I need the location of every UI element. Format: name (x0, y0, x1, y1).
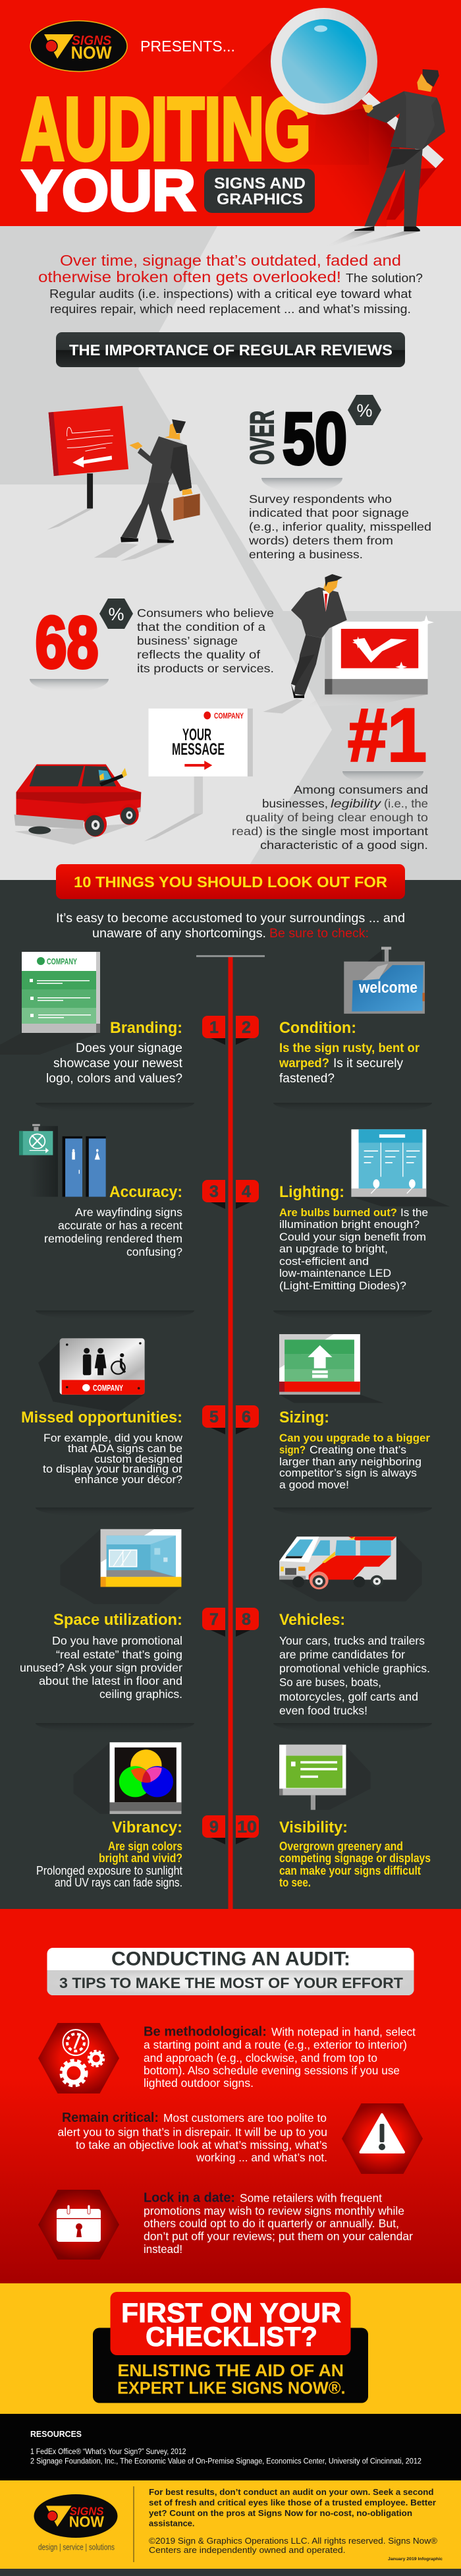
item 4: lighting: Is the (400, 1206, 428, 1219)
item 2: condition: Condition: (279, 1019, 356, 1037)
stat: 68 percent: 68 (36, 602, 99, 683)
item 9: vibrancy (36, 1819, 182, 1889)
item 4: lighting: Are bulbs burned out? (279, 1206, 397, 1219)
logo: Signs Now (30, 21, 127, 71)
text block: resources: RESOURCES (30, 2429, 82, 2439)
text: presents: PRESENTS... (140, 38, 235, 55)
item 6: sizing: a good move! (279, 1478, 349, 1491)
text block: footer note: set of fresh and critical eyes like those of a trusted employee. Better (149, 2498, 436, 2507)
item 1: branding: logo, colors and values? (46, 1072, 182, 1086)
text block: legibility (232, 783, 428, 852)
icon: bigger sign with arrow (279, 1334, 384, 1403)
text block: checklist intro: Be sure to check: (269, 927, 369, 941)
tip 1: be methodological: bottom). Also schedule evening sessions if you use (144, 2064, 400, 2077)
item 1: branding: showcase your newest (53, 1057, 183, 1070)
item 10: visibility: can make your signs difficult (279, 1864, 421, 1877)
text block: survey respondents: indicated that poor signage (249, 506, 409, 519)
item 10: visibility: Overgrown greenery and (279, 1840, 403, 1853)
heading banner: importance of regular reviews: THE IMPORTANCE OF REGULAR REVIEWS (69, 341, 393, 359)
item 1: branding: Branding: (110, 1019, 182, 1037)
text block: survey respondents: words) deters them from (248, 534, 393, 547)
logo: footer Signs Now: NOW (69, 2513, 104, 2530)
number tabs 5 and 6: 6 (242, 1408, 251, 1426)
heading banner: importance of regular reviews (56, 332, 405, 367)
item 5: missed opportunities: For example, did you know (43, 1432, 182, 1444)
text block: intro: requires repair, which need replacement ... and what’s missing. (50, 302, 411, 316)
item 5: missed opportunities: custom designed (94, 1453, 182, 1465)
text block: legibility: legibility (331, 797, 382, 810)
stat: over 50 percent (244, 395, 381, 492)
item 8: vehicles (279, 1611, 430, 1717)
number tabs 1 and 2: 2 (242, 1018, 251, 1037)
item 8: vehicles: Your cars, trucks and trailers (279, 1634, 425, 1647)
text block: intro: otherwise broken often gets overlooked! (38, 268, 341, 285)
item 3: accuracy: Are wayfinding signs (75, 1206, 182, 1219)
text block: consumers who believe (137, 606, 274, 675)
item 4: lighting: (Light-Emitting Diodes)? (279, 1279, 406, 1292)
item 2: condition: Is the sign rusty, bent or (279, 1041, 420, 1055)
heading banner: 10 things (56, 864, 405, 899)
item 5: missed opportunities: that ADA signs can be (68, 1443, 182, 1455)
item 7: space utilization (20, 1611, 182, 1701)
item 7: space utilization: “real estate” that’s going (56, 1648, 182, 1661)
item 10: visibility: competing signage or displays (279, 1852, 431, 1865)
text block: legibility: (i.e., the (384, 797, 428, 810)
item 5: missed opportunities: enhance your décor? (74, 1474, 182, 1486)
item 8: vehicles: motorcycles, golf carts and (279, 1690, 418, 1703)
tip 2: remain critical: alert you to sign that’s in disrepair. It will be up to you (58, 2125, 327, 2138)
logo: Signs Now: SIGNS (72, 34, 112, 48)
callout: first on your checklist: CHECKLIST? (146, 2321, 317, 2352)
item 2: condition: warped? (279, 1057, 329, 1070)
icon: branding sign (0, 952, 100, 1055)
item 6: sizing: larger than any neighboring (279, 1455, 421, 1468)
number tabs 1 and 2 (202, 1016, 259, 1045)
text block: resources (30, 2429, 421, 2465)
tip 3: lock in a date: don’t put off your reviews; put them on your calendar (144, 2229, 413, 2242)
item 3: accuracy (44, 1183, 182, 1258)
tip 2: remain critical: Remain critical: (62, 2111, 159, 2125)
item 4: lighting: Lighting: (279, 1183, 344, 1201)
item 7: space utilization: Do you have promotional (52, 1634, 182, 1647)
tip 2: remain critical (58, 2111, 327, 2164)
item 9: vibrancy: bright and vivid? (99, 1852, 182, 1865)
callout: first on your checklist (93, 2292, 368, 2403)
item 3: accuracy: confusing? (126, 1245, 182, 1258)
text block: intro (38, 252, 423, 316)
stat: over 50 percent: % (356, 401, 373, 421)
heading: signs and graphics pill (204, 169, 315, 213)
text block: survey respondents: Survey respondents who (249, 492, 392, 506)
number tabs 3 and 4: 4 (242, 1183, 251, 1201)
item 2: condition: welcome (358, 979, 418, 997)
icon: man with magnifier (326, 69, 445, 249)
item 4: lighting: cost-efficient and (279, 1255, 369, 1268)
item 8: vehicles: Vehicles: (279, 1611, 345, 1629)
heading: signs and graphics pill: SIGNS AND (214, 175, 306, 192)
logo: footer Signs Now (34, 2494, 117, 2538)
text block: checklist intro: unaware of any shortcomings. (92, 927, 266, 941)
item 2: condition: fastened? (279, 1072, 335, 1086)
text block: consumers who believe: that the condition of a (137, 620, 265, 633)
icon: calendar hexagon (38, 2190, 119, 2260)
text block: legibility: is the single most important (266, 825, 428, 838)
icon: rusty welcome sign (344, 947, 425, 1014)
item shadows (36, 1103, 432, 1734)
heading card: conducting an audit: 3 TIPS TO MAKE THE MOST OF YOUR EFFORT (59, 1975, 404, 1991)
tip 3: lock in a date: instead! (144, 2242, 182, 2256)
callout: first on your checklist: EXPERT LIKE SIGNS NOW®. (117, 2380, 345, 2398)
callout: first on your checklist: FIRST ON YOUR (121, 2297, 341, 2328)
number tabs 9 and 10: 9 (209, 1818, 219, 1836)
tip 1: be methodological: Be methodological: (144, 2025, 267, 2039)
text block: footer note: ©2019 Sign & Graphics Operations LLC. All rights reserved. Signs Now® (149, 2536, 437, 2546)
text block: resources: 2 Signage Foundation, Inc., The Economic Value of On-Premise Signage, Economics Center, University of Cincinnati, 2012 (30, 2457, 421, 2465)
icon: visibility sign (279, 1745, 370, 1810)
logo: Signs Now: NOW (71, 43, 112, 63)
stat: over 50 percent: 50 (283, 398, 347, 480)
item 10: visibility (279, 1819, 431, 1889)
item 8: vehicles: promotional vehicle graphics. (279, 1662, 430, 1675)
text block: checklist intro: It’s easy to become accustomed to your surroundings ... and (56, 912, 405, 925)
item 4: lighting: Could your sign benefit from (279, 1231, 426, 1243)
item 1: branding (46, 1019, 183, 1086)
number tabs 7 and 8: 7 (209, 1610, 219, 1629)
heading card: conducting an audit: CONDUCTING AN AUDIT: (111, 1948, 350, 1970)
text block: checklist intro (56, 912, 405, 941)
number tabs 1 and 2: 1 (209, 1018, 219, 1037)
text block: legibility: businesses, (262, 797, 328, 810)
item 7: space utilization: Space utilization: (53, 1611, 182, 1629)
number tabs 7 and 8: 8 (242, 1610, 251, 1629)
number tabs 3 and 4 (202, 1180, 259, 1209)
item 4: lighting: an upgrade to bright, (279, 1243, 388, 1255)
callout: first on your checklist: ENLISTING THE AID OF AN (117, 2362, 344, 2380)
icon: your message sign with car (14, 709, 253, 844)
icon: red misspelled sign with walking man (47, 406, 200, 561)
icon: gauge and gears hexagon (38, 2023, 119, 2093)
text block: survey respondents: (e.g., inferior quality, misspelled (249, 520, 431, 533)
item 4: lighting: illumination bright enough? (279, 1218, 420, 1231)
item 5: missed opportunities (21, 1383, 183, 1486)
item 3: accuracy: accurate or has a recent (58, 1219, 182, 1232)
heading: auditing: AUDITING (21, 79, 311, 179)
text block: footer note: January 2019 Infographic (388, 2558, 443, 2561)
text block: footer note: assistance. (149, 2518, 195, 2529)
item 4: lighting (279, 1183, 428, 1292)
text block: your message sign copy: COMPANY (214, 711, 244, 720)
text block: intro: Regular audits (i.e. inspections) with a critical eye toward what (49, 287, 412, 301)
number tabs 3 and 4: 3 (209, 1183, 219, 1201)
tip 1: be methodological: a starting point and a route (e.g., exterior to interior) (144, 2038, 407, 2051)
tip 3: lock in a date (144, 2191, 413, 2256)
item 9: vibrancy: and UV rays can fade signs. (55, 1876, 182, 1889)
icon: magnifying glass (271, 8, 444, 168)
logo: footer Signs Now: SIGNS (70, 2504, 104, 2517)
text block: your message sign copy: YOUR (182, 726, 211, 744)
text block: consumers who believe: reflects the quality of (137, 648, 260, 661)
icon: wrapped van (279, 1537, 422, 1601)
item 1: branding: Does your signage (76, 1041, 182, 1055)
text block: your message sign copy (172, 711, 244, 759)
number tabs 5 and 6: 5 (209, 1408, 219, 1426)
item 2: condition: Is it securely (333, 1057, 403, 1070)
heading card: conducting an audit (47, 1948, 414, 1995)
item 2: condition (279, 979, 420, 1086)
text block: your message sign copy: MESSAGE (172, 740, 225, 759)
icon: interior space sign (61, 1529, 181, 1604)
tip 3: lock in a date: promotions may wish to review signs monthly while (144, 2204, 404, 2217)
item 3: accuracy: remodeling rendered them (44, 1232, 182, 1245)
stat: over 50 percent: OVER (244, 411, 281, 465)
tip 2: remain critical: to take an objective look at what’s missing, what’s (76, 2138, 327, 2152)
text block: consumers who believe: business’ signage (137, 634, 238, 647)
text block: legibility: characteristic of a good sign. (260, 838, 428, 852)
text block: intro: Over time, signage that’s outdated, faded and (60, 252, 401, 269)
tip 3: lock in a date: Some retailers with frequent (240, 2191, 382, 2204)
item 9: vibrancy: Are sign colors (108, 1840, 182, 1853)
text block: survey respondents (248, 492, 431, 561)
stat: number one: #1 (348, 693, 427, 778)
number tabs 9 and 10: 10 (237, 1818, 257, 1836)
item 10: visibility: to see. (279, 1876, 311, 1889)
stat: 68 percent: % (108, 604, 124, 624)
text block: resources: 1 FedEx Office® “What’s Your Sign?” Survey, 2012 (30, 2448, 186, 2456)
item 10: visibility: Visibility: (279, 1819, 348, 1836)
item 6: sizing: sign? (279, 1444, 306, 1456)
item 5: missed opportunities: to display your branding or (43, 1463, 183, 1475)
item 9: vibrancy: Prolonged exposure to sunlight (36, 1864, 182, 1877)
icon: lighted sign (351, 1129, 450, 1206)
heading banner: 10 things: 10 THINGS YOU SHOULD LOOK OUT FOR (74, 873, 387, 891)
item 5: missed opportunities: Missed opportunities: (21, 1409, 182, 1426)
item 6: sizing: Creating one that’s (310, 1444, 406, 1456)
item 6: sizing (279, 1409, 430, 1491)
item 9: vibrancy: Vibrancy: (112, 1819, 182, 1836)
heading: signs and graphics pill: GRAPHICS (217, 190, 303, 208)
text block: footer note: Centers are independently owned and operated. (149, 2545, 345, 2555)
divider (133, 2486, 134, 2562)
item 5: missed opportunities: COMPANY (93, 1383, 123, 1393)
number tabs 5 and 6 (202, 1405, 259, 1434)
text block: legibility: quality of being clear enough to (246, 811, 428, 824)
item 7: space utilization: ceiling graphics. (99, 1687, 182, 1701)
text block: consumers who believe: its products or services. (137, 662, 274, 675)
text block: footer note: yet? Count on the pros at Signs Now for no-cost, no-obligation (149, 2508, 412, 2518)
text block: legibility: read) (232, 825, 263, 838)
icon: colour circles sign (74, 1742, 181, 1814)
tip 2: remain critical: Most customers are too polite to (163, 2111, 327, 2124)
item 3: accuracy: Accuracy: (109, 1183, 182, 1201)
tip 1: be methodological (144, 2025, 416, 2090)
item 6: sizing: competitor’s sign is always (279, 1467, 417, 1479)
text block: footer note: For best results, don’t conduct an audit on your own. Seek a second (149, 2487, 434, 2497)
tip 1: be methodological: and approach (e.g., clockwise, and from top to (144, 2051, 377, 2064)
text block: intro: The solution? (346, 271, 423, 285)
icon: ADA sign (38, 1338, 145, 1413)
panel: hero header (21, 8, 445, 249)
tip 3: lock in a date: Lock in a date: (144, 2191, 235, 2206)
item 4: lighting: low-maintenance LED (279, 1267, 391, 1279)
item 6: sizing: Can you upgrade to a bigger (279, 1432, 430, 1444)
icon: wayfinding sign and doors (19, 1124, 106, 1197)
tip 2: remain critical: working ... and what’s not. (196, 2151, 327, 2164)
text: tagline: design | service | solutions (38, 2542, 115, 2552)
item 6: sizing: Sizing: (279, 1409, 329, 1426)
text block: legibility: Among consumers and (294, 783, 428, 796)
icon: branding sign: COMPANY (47, 956, 77, 966)
text block: footer note (149, 2487, 443, 2561)
tip 3: lock in a date: others could opt to do it quarterly or annually. But, (144, 2217, 399, 2230)
item 8: vehicles: So are buses, boats, (279, 1676, 381, 1689)
tip 1: be methodological: lighted outdoor signs. (144, 2076, 254, 2090)
item 7: space utilization: unused? Ask your sign provider (20, 1661, 182, 1674)
icon: leaning man with check sign (263, 574, 434, 713)
number tabs 7 and 8 (202, 1608, 259, 1637)
heading: your: YOUR (22, 159, 196, 223)
item 8: vehicles: even food trucks! (279, 1704, 367, 1717)
icon: warning hexagon (342, 2103, 423, 2174)
item 7: space utilization: about the latest in floor and (39, 1674, 182, 1687)
tip 1: be methodological: With notepad in hand, select (271, 2025, 416, 2038)
item 8: vehicles: are prime candidates for (279, 1648, 405, 1661)
center timeline (196, 955, 265, 1909)
stat: 68 percent (30, 599, 133, 692)
number tabs 9 and 10 (202, 1815, 259, 1844)
text block: survey respondents: entering a business. (249, 548, 363, 561)
text block: consumers who believe: Consumers who believe (137, 606, 274, 620)
